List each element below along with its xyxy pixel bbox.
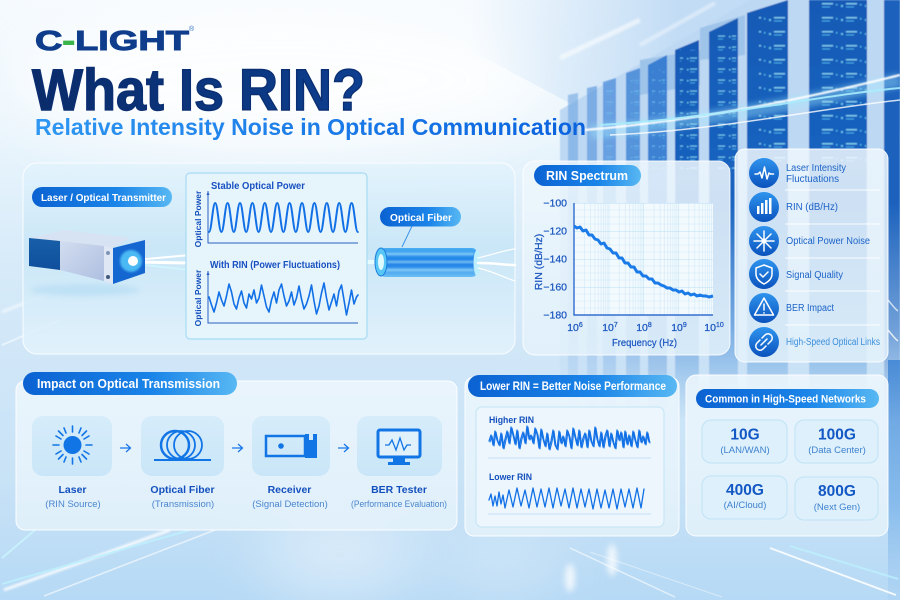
- panel: common in high-speed networks: [686, 375, 888, 536]
- chart: higher RIN: [488, 415, 651, 458]
- card: 800G: (Next Gen): [814, 502, 860, 513]
- beam: laser output: [135, 255, 190, 270]
- chart: lower RIN: [488, 472, 651, 514]
- step: optical fiber: [141, 416, 224, 510]
- card: 10G: 10G: [730, 426, 760, 444]
- step: receiver: (Signal Detection): [252, 499, 328, 510]
- line chart: RIN versus frequency: 10: [671, 322, 683, 334]
- text: BER impact: BER Impact: [786, 303, 834, 314]
- line chart: RIN versus frequency: 10: [602, 322, 614, 334]
- optical fiber label: Optical Fiber: [390, 212, 452, 224]
- logo: C-LIGHT: ®: [189, 25, 195, 33]
- line chart: RIN versus frequency: −160: [543, 282, 567, 294]
- RIN spectrum heading: RIN Spectrum: [546, 168, 628, 183]
- text: high-speed optical links: High-Speed Optical Links: [786, 337, 880, 348]
- step: receiver: Receiver: [268, 484, 311, 496]
- arrow: [232, 444, 242, 452]
- line chart: RIN versus frequency: RIN (dB/Hz): [533, 234, 545, 290]
- text: optical power noise: Optical Power Noise: [786, 236, 870, 247]
- line chart: RIN versus frequency: −120: [543, 226, 567, 238]
- RIN spectrum heading: [534, 165, 641, 186]
- card: 400G: (AI/Cloud): [724, 500, 766, 511]
- arrow: [120, 444, 130, 452]
- line chart: RIN versus frequency: 9: [683, 322, 687, 329]
- beam: into fiber: [367, 254, 385, 270]
- icon: chain link: [749, 327, 779, 357]
- step: laser: [32, 416, 112, 510]
- line chart: RIN versus frequency: 10: [716, 322, 724, 329]
- icon: bars: [749, 192, 779, 222]
- line chart: RIN versus frequency: 10: [704, 322, 716, 334]
- icon: shield: [749, 259, 779, 289]
- chart: higher RIN: Higher RIN: [489, 415, 534, 426]
- line chart: RIN versus frequency: −100: [543, 198, 567, 210]
- text: RIN units: RIN (dB/Hz): [786, 202, 838, 213]
- waveform comparison card: [186, 173, 367, 339]
- card: 10G: [702, 420, 787, 463]
- impact heading: [23, 372, 237, 395]
- title: What Is RIN?: [32, 58, 365, 123]
- comparison heading: [468, 375, 677, 397]
- optical fiber tube: [375, 248, 480, 277]
- networks heading: [696, 389, 879, 408]
- chart: with RIN power fluctuations: With RIN (Power Fluctuations): [210, 260, 340, 271]
- text: signal quality: Signal Quality: [786, 270, 843, 281]
- line chart: RIN versus frequency: 10: [567, 322, 579, 334]
- beam: fiber output: [478, 249, 515, 281]
- text: laser intensity fluctuations: Fluctuations: [786, 174, 839, 185]
- step: BER tester: (Performance Evaluation): [351, 499, 447, 510]
- step: receiver: [252, 416, 330, 510]
- card: 100G: 100G: [818, 426, 856, 444]
- line chart: RIN versus frequency: 8: [648, 322, 652, 329]
- networks heading: Common in High-Speed Networks: [705, 394, 866, 406]
- logo: C-LIGHT: C -LIGHT: [35, 25, 189, 56]
- step: BER tester: [351, 416, 447, 510]
- step: BER tester: BER Tester: [371, 484, 427, 496]
- chart: with RIN power fluctuations: [193, 260, 358, 326]
- card: 400G: 400G: [726, 482, 764, 499]
- card: 100G: [795, 420, 878, 463]
- card: 400G: [702, 476, 787, 519]
- subtitle: Relative Intensity Noise in Optical Communication: [35, 114, 586, 140]
- chart: stable optical power: Optical Power: [193, 190, 203, 247]
- step: optical fiber: Optical Fiber: [150, 484, 215, 496]
- comparison heading: Lower RIN = Better Noise Performance: [480, 381, 666, 393]
- step: optical fiber: (Transmission): [152, 499, 214, 510]
- line chart: RIN versus frequency: −180: [543, 310, 567, 322]
- panel: RIN key concepts: [735, 149, 888, 362]
- chart: stable optical power: [193, 181, 358, 247]
- icon: intensity fluctuations: [749, 158, 779, 188]
- chart: stable optical power: Stable Optical Power: [211, 181, 305, 192]
- card: 800G: 800G: [818, 483, 856, 500]
- icon: warning triangle: [749, 293, 779, 323]
- line chart: RIN versus frequency: 7: [614, 322, 618, 329]
- step: laser: (RIN Source): [45, 499, 101, 510]
- laser module: [29, 230, 145, 296]
- card: 800G: [795, 477, 878, 520]
- card: 10G: (LAN/WAN): [720, 445, 770, 456]
- step: laser: Laser: [58, 484, 87, 496]
- line chart: RIN versus frequency: 6: [579, 322, 583, 329]
- arrow: [338, 444, 348, 452]
- line chart: RIN versus frequency: [533, 198, 724, 349]
- text: laser intensity fluctuations: [786, 163, 846, 185]
- line chart: RIN versus frequency: Frequency (Hz): [612, 337, 677, 349]
- text: laser intensity fluctuations: Laser Intensity: [786, 163, 846, 174]
- laser transmitter label: Laser / Optical Transmitter: [41, 192, 166, 204]
- panel: lower RIN comparison: [465, 375, 679, 536]
- line chart: RIN versus frequency: −140: [543, 254, 567, 266]
- line chart: RIN versus frequency: 10: [636, 322, 648, 334]
- panel: laser to fiber signal path: [23, 163, 515, 354]
- optical fiber label: [380, 207, 461, 247]
- impact heading: Impact on Optical Transmission: [37, 376, 220, 391]
- card: 100G: (Data Center): [808, 445, 866, 456]
- chart: with RIN power fluctuations: Optical Power: [193, 269, 203, 326]
- chart: lower RIN: Lower RIN: [489, 472, 532, 483]
- icon: optical noise burst: [749, 226, 779, 256]
- panel: RIN spectrum: [523, 161, 730, 355]
- panel: impact on optical transmission: [16, 372, 457, 530]
- laser transmitter label: [32, 187, 172, 207]
